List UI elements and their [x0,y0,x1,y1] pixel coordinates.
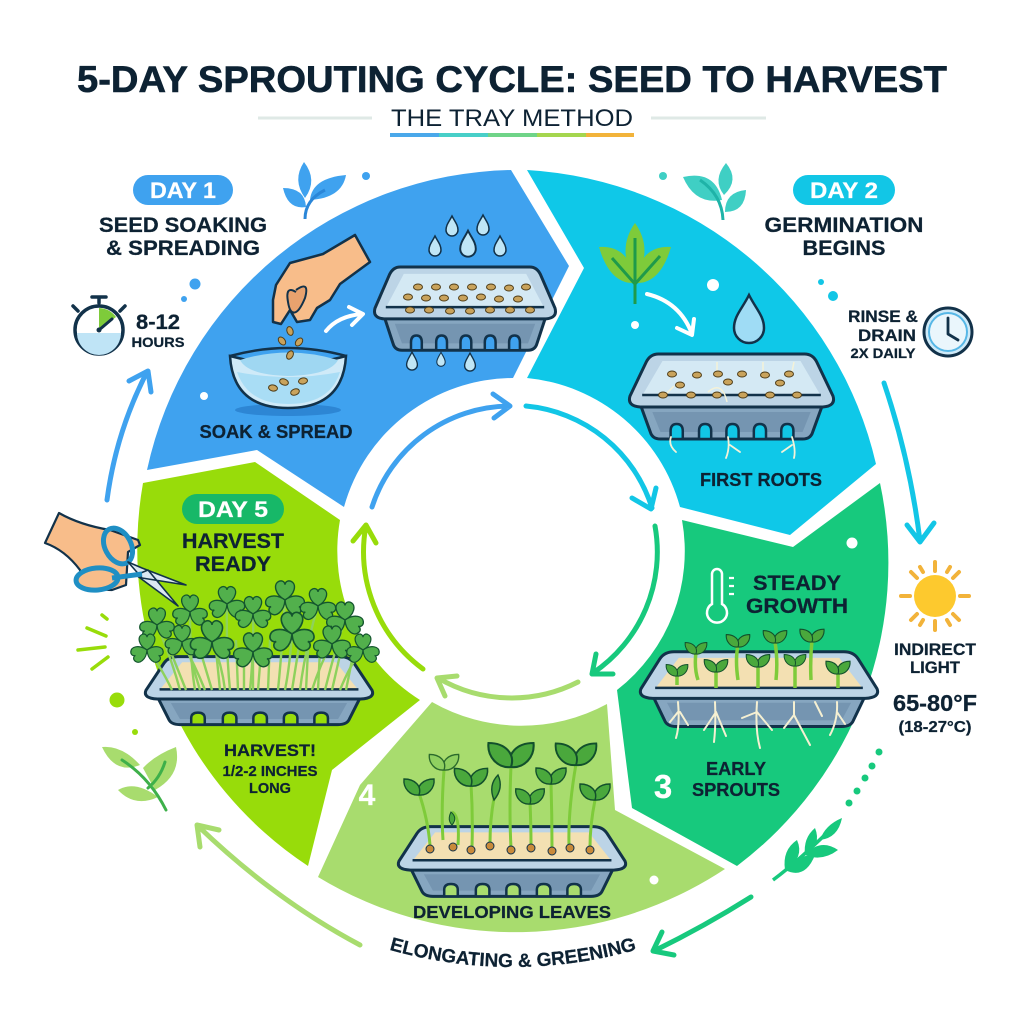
steady growth label: GROWTH [746,595,848,618]
first roots label: FIRST ROOTS [700,470,822,490]
day 1 label: DAY 1 [150,178,216,203]
outer arrow: blue [107,371,151,500]
early sprouts label: SPROUTS [692,780,780,800]
seeds falling [277,326,304,360]
early sprouts label: EARLY [706,759,766,779]
day 5 label: READY [195,553,271,576]
harvest label: LONG [249,780,291,797]
icon: water bowl [230,348,346,416]
icon: blue leaf sprig [283,162,346,219]
tray: first roots [629,354,834,439]
day 1 label: & SPREADING [106,237,260,260]
title: 5-DAY SPROUTING CYCLE: SEED TO HARVEST [77,59,947,100]
icon: teal branch [773,818,842,880]
indirect light and temperature labels: LIGHT [910,659,960,677]
harvest label [222,741,318,797]
panel: day 3 green segment [617,483,888,866]
day 1 label: SEED SOAKING [99,214,267,237]
day 2 label: BEGINS [802,237,886,260]
lime burst lines [78,615,108,669]
microgreens stems [147,600,363,690]
drops below tray 1 [407,352,475,371]
step number 3: 3 [654,768,672,805]
panel: day 1 blue segment [147,170,569,507]
seeds at base of tray 4 sprouts [426,842,594,855]
subtitle with divider lines and rainbow bar: THE TRAY METHOD [391,105,633,132]
tray: harvest [145,657,373,725]
decorative dots [110,172,882,884]
microgreens clover leaves [129,581,381,669]
curved label: elongating and greening: ELONGATING & GREENING [390,937,636,968]
hours label: 8-12 [136,311,180,334]
icon: clock [924,308,972,356]
seedlings tray 3 [666,629,850,688]
day 1 label [99,175,267,260]
day 5 label: HARVEST [182,530,284,553]
rinse and drain label: RINSE & [848,308,918,326]
icon: hand dropping seeds [273,235,370,324]
indirect light and temperature labels: (18-27°C) [898,719,972,736]
panel: day 2 cyan segment [527,170,876,535]
icon: stopwatch [73,297,125,355]
icon: thermometer [707,569,734,623]
panel: day 4 light green segment [318,702,725,932]
soak and spread label: SOAK & SPREAD [200,422,352,442]
early sprouts label [692,759,780,800]
seedlings tray 4 [404,743,610,848]
hours label: HOURS [132,334,184,350]
roots under tray 2 [670,437,795,458]
icon: white arrow from bowl to tray [326,307,363,331]
icon: white curved arrow [647,294,694,335]
day 5 label [182,494,284,576]
steady growth label: STEADY [753,572,841,595]
indirect light and temperature labels: INDIRECT [894,641,976,659]
panel: day 5 lime segment [137,462,420,866]
harvest label: 1/2-2 INCHES [222,763,318,780]
seeds on tray 1 [404,284,534,314]
outer arrow: light green [197,825,360,945]
tray: developing leaves [398,827,626,896]
outer arrow: green [653,897,751,955]
roots tray 3 [670,702,845,748]
day 2 label [764,175,924,260]
steady growth label [746,572,848,618]
rinse and drain label: 2X DAILY [850,345,916,361]
icon: green leaf branch bottom left [102,747,177,810]
icon: large water drop [734,295,764,343]
hours label [132,311,184,350]
subtitle with divider lines and rainbow bar [258,105,766,137]
indirect light and temperature labels: 65-80°F [893,690,977,716]
day 2 label: GERMINATION [764,214,924,237]
rinse and drain label [848,308,918,361]
harvest label: HARVEST! [224,741,316,760]
rinse and drain label: DRAIN [858,327,916,345]
indirect light and temperature labels [893,641,977,736]
tray: steady growth [640,652,878,727]
outer arrow: cyan [884,383,934,542]
seeds with root tips on tray 2 [658,362,802,402]
water drops above tray 1 [429,215,506,257]
developing leaves label: DEVELOPING LEAVES [413,902,611,922]
inner arrow ring [353,394,657,698]
day 2 label: DAY 2 [810,178,878,203]
icon: sun [901,562,969,630]
icon: hand with scissors [45,513,186,606]
tray: soaking seeds [374,267,556,350]
step number 4: 4 [359,779,376,812]
icon: green plant [599,223,671,304]
day 5 label: DAY 5 [198,497,268,522]
icon: teal leaf sprig [683,163,746,220]
